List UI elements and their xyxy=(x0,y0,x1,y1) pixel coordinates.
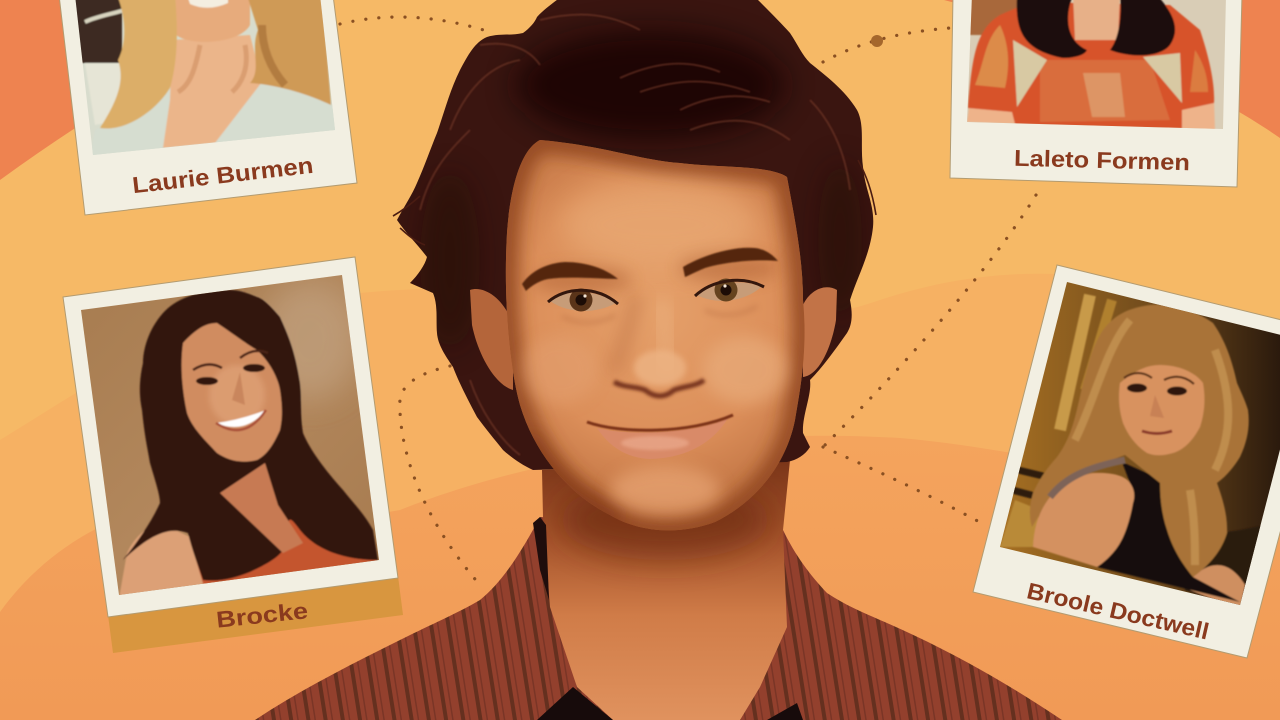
caption: Laleto Formen: Laleto Formen xyxy=(1014,145,1190,175)
eyebrows xyxy=(522,248,778,291)
hair shading and strands xyxy=(420,15,862,455)
caption: Brocke: Brocke xyxy=(215,597,309,633)
left ear xyxy=(470,289,513,390)
collar tips xyxy=(537,687,803,720)
shirt xyxy=(255,517,1062,720)
collar shadow xyxy=(533,517,549,600)
central portrait xyxy=(255,0,1062,720)
mouth xyxy=(587,415,733,459)
polaroid: Laurie Burmen xyxy=(59,0,357,215)
polaroid: Laleto Formen xyxy=(950,0,1242,187)
caption: Brooke Dockwell: Broole Doctwell xyxy=(1024,577,1212,645)
nose xyxy=(614,350,704,396)
photo frame xyxy=(63,257,398,617)
icon: connector node xyxy=(871,35,883,47)
hair xyxy=(397,0,873,470)
stray hair wisps xyxy=(393,160,876,245)
caption band xyxy=(108,576,403,653)
polaroid: Brocke xyxy=(63,257,403,653)
caption: Laurie Burmen: Laurie Burmen xyxy=(131,152,315,198)
right ear xyxy=(803,287,837,377)
eyes xyxy=(548,278,764,323)
face shading xyxy=(506,140,805,530)
neck xyxy=(542,460,790,720)
dotted connector lines xyxy=(340,17,1036,585)
polaroid: Brooke Dockwell xyxy=(973,265,1280,658)
neck shading xyxy=(560,480,770,560)
face xyxy=(506,140,805,530)
